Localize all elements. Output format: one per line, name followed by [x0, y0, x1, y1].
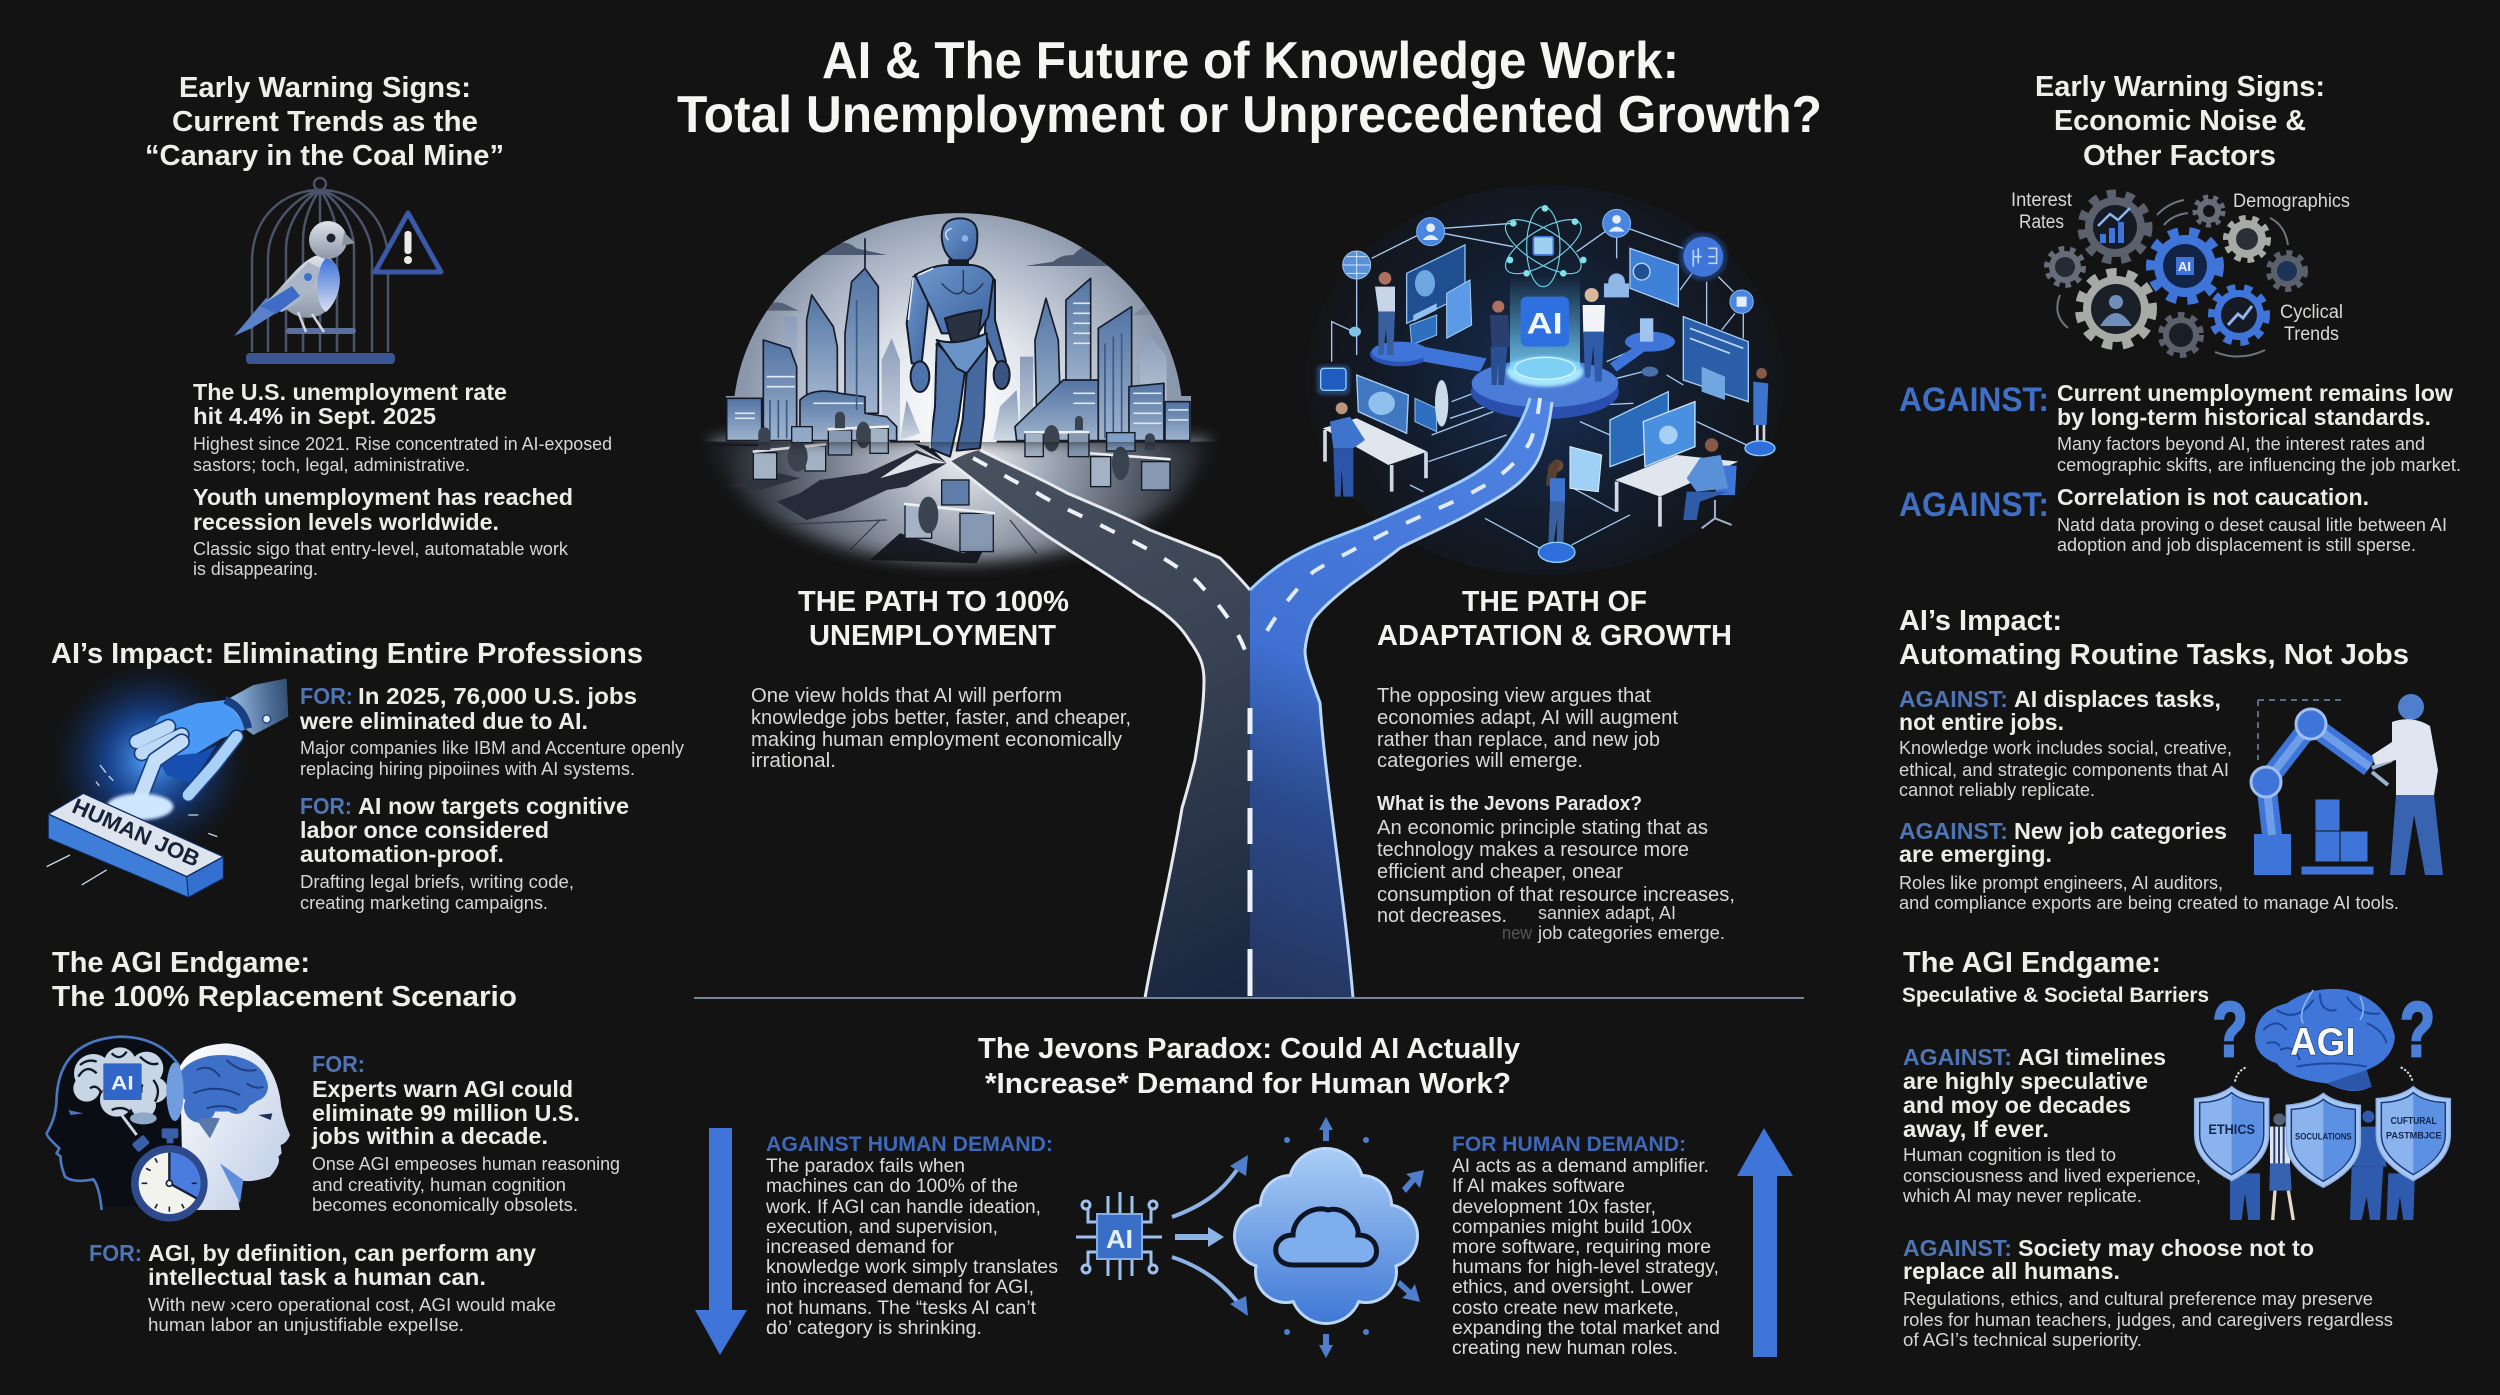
road: path to unemployment [950, 450, 1250, 998]
text: unemployment remains low: AGAINST: [1899, 381, 2049, 419]
text: what is the Jevons paradox: consumption of that resource increases, [1377, 884, 1735, 906]
title: Total Unemployment or Unprecedented Growth? [677, 86, 1822, 144]
text: 99 million jobs [311, 1051, 620, 1215]
text: unemployment remains low: cemographic skifts, are influencing the job market. [2057, 454, 2461, 475]
road markings [973, 398, 1540, 996]
text: society may choose: Regulations, ethics, and cultural preference may preserve [1903, 1288, 2373, 1309]
panel: the path to 100% unemployment [751, 586, 1131, 772]
panel: AGI endgame, barriers [1902, 947, 2450, 1350]
labels: factors: Cyclical [2280, 302, 2343, 323]
text: what is the Jevons paradox: efficient and cheaper, onear [1377, 861, 1623, 883]
heading: adaptation and growth: THE PATH OF [1462, 586, 1647, 618]
text: what is the Jevons paradox: What is the Jevons Paradox? [1377, 793, 1642, 815]
icon: gears of economic factors: AI [2178, 259, 2191, 274]
text: 99 million jobs: and creativity, human cognition [312, 1174, 566, 1195]
text: against human demand: knowledge work simply translates [766, 1257, 1058, 1278]
heading: path to unemployment: UNEMPLOYMENT [809, 620, 1056, 652]
text: against human demand: machines can do 100% of the [766, 1176, 1018, 1197]
text: unemployment rate: sastors; toch, legal, administrative. [193, 454, 470, 475]
text: youth unemployment: is disappearing. [193, 558, 318, 579]
panel: AGI endgame, replacement [47, 947, 620, 1335]
text: for human demand: expanding the total market and [1452, 1318, 1720, 1339]
text: AGI timelines: AGI timelines [2018, 1044, 2166, 1070]
text: youth unemployment: Youth unemployment has reached [193, 484, 573, 510]
heading: speculative barriers: Speculative & Societal Barriers [1902, 984, 2209, 1007]
text: AGI timelines [1902, 1044, 2201, 1206]
text: cognitive labor: creating marketing campaigns. [300, 892, 548, 913]
heading: adaptation and growth: ADAPTATION & GROWTH [1377, 620, 1732, 652]
panel: early warning signs, economic noise [1899, 71, 2461, 555]
text: correlation: adoption and job displacement is still sperse. [2057, 534, 2416, 555]
text: 76,000 jobs: were eliminated due to AI. [299, 708, 588, 734]
title [677, 32, 1822, 144]
icon: AGI brain with shields: ? [2213, 988, 2248, 1073]
text: for human demand: more software, requiring more [1452, 1237, 1711, 1258]
icon: human guiding robot arm [2251, 694, 2443, 875]
text: society may choose: replace all humans. [1903, 1258, 2120, 1284]
text: against human demand: AGAINST HUMAN DEMAND: [766, 1133, 1053, 1156]
text: 99 million jobs: jobs within a decade. [311, 1123, 548, 1149]
text: for human demand: AI acts as a demand amplifier. [1452, 1156, 1709, 1177]
text: what is the Jevons paradox: sanniex adapt, AI [1538, 902, 1676, 923]
text: cognitive labor: Drafting legal briefs, writing code, [300, 871, 574, 892]
text: unemployment remains low: Current unemployment remains low [2057, 380, 2453, 406]
text: against human demand: increased demand for [766, 1237, 955, 1258]
text: for human demand: ethics, and oversight. Lower [1452, 1277, 1694, 1298]
text: displaces tasks: AI displaces tasks, [2014, 686, 2221, 712]
panel: AI's impact, automating tasks [1899, 605, 2443, 913]
text: youth unemployment: recession levels worldwide. [193, 509, 499, 535]
text: AGI timelines: are highly speculative [1903, 1068, 2148, 1094]
heading: automating routine tasks: AI’s Impact: [1899, 605, 2062, 637]
text: new job categories [1899, 818, 2399, 913]
text: cognitive labor: automation-proof. [300, 841, 504, 867]
heading: path to unemployment: THE PATH TO 100% [798, 586, 1069, 618]
text: unemployment remains low: by long-term historical standards. [2057, 404, 2431, 430]
arrow: down, against human demand [695, 1128, 747, 1355]
icon: AGI brain with shields: SOCULATIONS [2295, 1131, 2352, 1141]
text: displaces tasks: AGAINST: [1899, 686, 2008, 712]
heading: canary: Current Trends as the [172, 106, 478, 138]
text: any intellectual task: FOR: [89, 1240, 142, 1266]
heading: automating routine tasks [1899, 605, 2409, 671]
road: path of adaptation [1250, 398, 1552, 998]
text: 99 million jobs: becomes economically obsolets. [312, 1194, 578, 1215]
text: cognitive labor: AI now targets cognitive [358, 793, 629, 819]
labels: factors: Demographics [2233, 191, 2350, 212]
text: opposing view [1377, 685, 1678, 772]
icon: AGI brain with shields: ? [2400, 988, 2435, 1073]
text: against human demand: not humans. The “tesks AI can’t [766, 1298, 1037, 1319]
text: correlation: Correlation is not caucation. [2057, 484, 2369, 510]
text: society may choose: AGAINST: [1903, 1235, 2012, 1261]
text: for human demand: costo create new markete, [1452, 1298, 1679, 1319]
divider [694, 997, 1804, 999]
text: 99 million jobs: FOR: [312, 1051, 365, 1077]
arrow: up, for human demand [1737, 1128, 1793, 1357]
text: new job categories: and compliance exports are being created to manage AI tools. [1899, 892, 2399, 913]
text: new job categories: New job categories [2014, 818, 2227, 844]
panel: AI's impact, eliminating professions [47, 638, 685, 913]
text: unemployment rate: The U.S. unemployment rate [193, 379, 507, 405]
text: correlation [1899, 484, 2447, 555]
text: any intellectual task: intellectual task a human can. [148, 1264, 486, 1290]
labels: factors [2011, 190, 2350, 345]
icon: AI chip [1076, 1192, 1162, 1280]
arrows: chip to cloud [1172, 1155, 1248, 1316]
text: opposing view: rather than replace, and new job [1377, 729, 1660, 751]
text: correlation: Natd data proving o deset causal litle between AI [2057, 514, 2447, 535]
text: new job categories: Roles like prompt engineers, AI auditors, [1899, 872, 2223, 893]
text: displaces tasks: ethical, and strategic components that AI [1899, 759, 2229, 780]
text: what is the Jevons paradox: job categories emerge. [1537, 922, 1725, 943]
labels: factors: Trends [2284, 324, 2339, 345]
text: against human demand: into increased demand for AGI, [766, 1277, 1034, 1298]
heading: canary: Early Warning Signs: [179, 72, 471, 104]
text: correlation: AGAINST: [1899, 486, 2049, 524]
text: unemployment rate [193, 379, 612, 475]
illustration: AI collaboration network [1305, 185, 1785, 575]
heading: canary: “Canary in the Coal Mine” [145, 140, 504, 172]
text: displaces tasks [1899, 686, 2232, 800]
text: displaces tasks: cannot reliably replicate. [1899, 779, 2095, 800]
heading: economic noise: Early Warning Signs: [2035, 71, 2325, 103]
icon: AGI brain with shields: PASTMBJCE [2386, 1130, 2442, 1140]
panel: the path of adaptation and growth [1377, 586, 1735, 943]
icon: AGI brain with shields [2195, 988, 2450, 1220]
text: AGI timelines: consciousness and lived experience, [1903, 1165, 2201, 1186]
text: against human demand: The paradox fails when [766, 1156, 965, 1177]
text: for human demand [1452, 1133, 1720, 1359]
text: opposing view: The opposing view argues that [1377, 685, 1651, 707]
text: what is the Jevons paradox [1377, 793, 1735, 943]
text: for human demand: humans for high-level strategy, [1452, 1257, 1719, 1278]
text: displaces tasks: Knowledge work includes social, creative, [1899, 737, 2232, 758]
heading: eliminating entire professions: AI’s Impact: Eliminating Entire Professions [51, 638, 643, 670]
text: displaces tasks: not entire jobs. [1899, 709, 2064, 735]
text: any intellectual task [89, 1240, 556, 1335]
icon: AI head, human head and clock [47, 1037, 290, 1222]
text: what is the Jevons paradox: not decreases. [1377, 905, 1507, 927]
text: one view: making human employment economically [751, 729, 1122, 751]
text: unemployment rate: hit 4.4% in Sept. 2025 [193, 403, 436, 429]
icon: AI chip: AI [1106, 1224, 1133, 1254]
heading: economic noise: Other Factors [2083, 140, 2276, 172]
heading: 100% replacement: The AGI Endgame: [52, 947, 310, 979]
icon: AGI brain with shields: AGI [2290, 1020, 2356, 1064]
icon: robotic hand striking human job block [47, 667, 288, 897]
text: unemployment remains low: Many factors beyond AI, the interest rates and [2057, 433, 2425, 454]
icon: caged robotic canary with warning triangle [234, 178, 441, 364]
text: any intellectual task: With new ›cero operational cost, AGI would make [148, 1294, 556, 1315]
heading: 100% replacement: The 100% Replacement Scenario [52, 981, 517, 1013]
text: cognitive labor: labor once considered [300, 817, 549, 843]
text: unemployment remains low [1899, 380, 2461, 475]
text: what is the Jevons paradox: new [1502, 922, 1533, 943]
text: AGI timelines: which AI may never replicate. [1902, 1185, 2142, 1206]
text: against human demand [765, 1133, 1058, 1339]
labels: factors: Interest [2011, 190, 2073, 211]
text: youth unemployment: Classic sigo that entry-level, automatable work [193, 538, 569, 559]
text: for human demand: development 10x faster, [1452, 1197, 1656, 1218]
panel: early warning signs, canary [145, 72, 612, 579]
text: society may choose [1903, 1235, 2393, 1350]
icon: AGI brain with shields: ETHICS [2208, 1121, 2255, 1137]
text: what is the Jevons paradox: technology makes a resource more [1377, 839, 1689, 861]
heading: speculative barriers [1902, 947, 2209, 1007]
text: one view [751, 685, 1131, 772]
panel: the forking road illustration [700, 185, 1785, 998]
illustration: robot over city dome [703, 213, 1217, 573]
text: society may choose: of AGI’s technical superiority. [1903, 1329, 2142, 1350]
illustration: AI collaboration network: AI [1527, 307, 1563, 340]
heading: adaptation and growth [1377, 586, 1732, 652]
text: 99 million jobs: eliminate 99 million U.S. [312, 1100, 580, 1126]
text: against human demand: work. If AGI can handle ideation, [765, 1197, 1041, 1218]
text: what is the Jevons paradox: An economic principle stating that as [1377, 817, 1708, 839]
text: new job categories: AGAINST: [1899, 818, 2008, 844]
text: for human demand: FOR HUMAN DEMAND: [1452, 1133, 1686, 1156]
labels: factors: Rates [2019, 212, 2064, 233]
text: opposing view: economies adapt, AI will augment [1377, 707, 1678, 729]
heading: speculative barriers: The AGI Endgame: [1903, 947, 2161, 979]
text: 99 million jobs: Onse AGI empeoses human reasoning [312, 1153, 620, 1174]
icon: AGI brain with shields: CUFTURAL [2391, 1116, 2437, 1127]
text: AGI timelines: and moy oe decades [1903, 1092, 2131, 1118]
text: one view: irrational. [751, 750, 836, 772]
text: cognitive labor: FOR: [300, 793, 352, 819]
text: for human demand: If AI makes software [1452, 1176, 1625, 1197]
text: 76,000 jobs: In 2025, 76,000 U.S. jobs [358, 683, 637, 709]
title: AI & The Future of Knowledge Work: [822, 32, 1679, 90]
text: 76,000 jobs: Major companies like IBM and Accenture openly [300, 737, 685, 758]
heading: Jevons paradox: *Increase* Demand for Human Work? [985, 1068, 1511, 1100]
text: any intellectual task: human labor an unjustifiable expeIIse. [148, 1314, 464, 1335]
icon: cloud with radiating arrows [1233, 1117, 1424, 1358]
road edges [950, 398, 1552, 998]
heading: economic noise: Economic Noise & [2054, 105, 2306, 137]
heading: path to unemployment [798, 586, 1069, 652]
text: AGI timelines: away, If ever. [1903, 1116, 2049, 1142]
text: 76,000 jobs: replacing hiring pipoiines with AI systems. [300, 758, 635, 779]
text: new job categories: are emerging. [1899, 841, 2052, 867]
heading: economic noise [2035, 71, 2325, 172]
text: youth unemployment [193, 484, 573, 579]
heading: Jevons paradox: The Jevons Paradox: Could AI Actually [978, 1033, 1520, 1065]
text: for human demand: companies might build 100x [1452, 1217, 1693, 1238]
icon: gears of economic factors [2047, 194, 2305, 357]
text: against human demand: execution, and supervision, [766, 1217, 998, 1238]
text: 76,000 jobs [299, 683, 685, 779]
text: unemployment rate: Highest since 2021. Rise concentrated in AI-exposed [193, 433, 612, 454]
text: 76,000 jobs: FOR: [300, 683, 353, 709]
text: any intellectual task: AGI, by definition, can perform any [148, 1240, 536, 1266]
icon: AI head, human head and clock: AI [111, 1073, 134, 1094]
heading: automating routine tasks: Automating Routine Tasks, Not Jobs [1899, 639, 2409, 671]
text: 99 million jobs: Experts warn AGI could [312, 1076, 573, 1102]
heading: 100% replacement [52, 947, 517, 1013]
text: against human demand: do’ category is shrinking. [766, 1318, 982, 1339]
text: society may choose: Society may choose not to [2018, 1235, 2314, 1261]
text: cognitive labor [300, 793, 629, 913]
text: one view: knowledge jobs better, faster, and cheaper, [751, 707, 1131, 729]
text: AGI timelines: AGAINST: [1903, 1044, 2012, 1070]
panel: the Jevons paradox [695, 1033, 1793, 1359]
icon: robotic hand striking human job block: HUMAN JOB [69, 793, 204, 872]
text: opposing view: categories will emerge. [1377, 750, 1583, 772]
text: for human demand: creating new human roles. [1452, 1338, 1678, 1359]
heading: Jevons paradox [978, 1033, 1520, 1100]
text: AGI timelines: Human cognition is tled to [1903, 1144, 2116, 1165]
heading: canary [145, 72, 504, 172]
text: one view: One view holds that AI will perform [751, 685, 1062, 707]
text: society may choose: roles for human teachers, judges, and caregivers regardless [1903, 1309, 2393, 1330]
